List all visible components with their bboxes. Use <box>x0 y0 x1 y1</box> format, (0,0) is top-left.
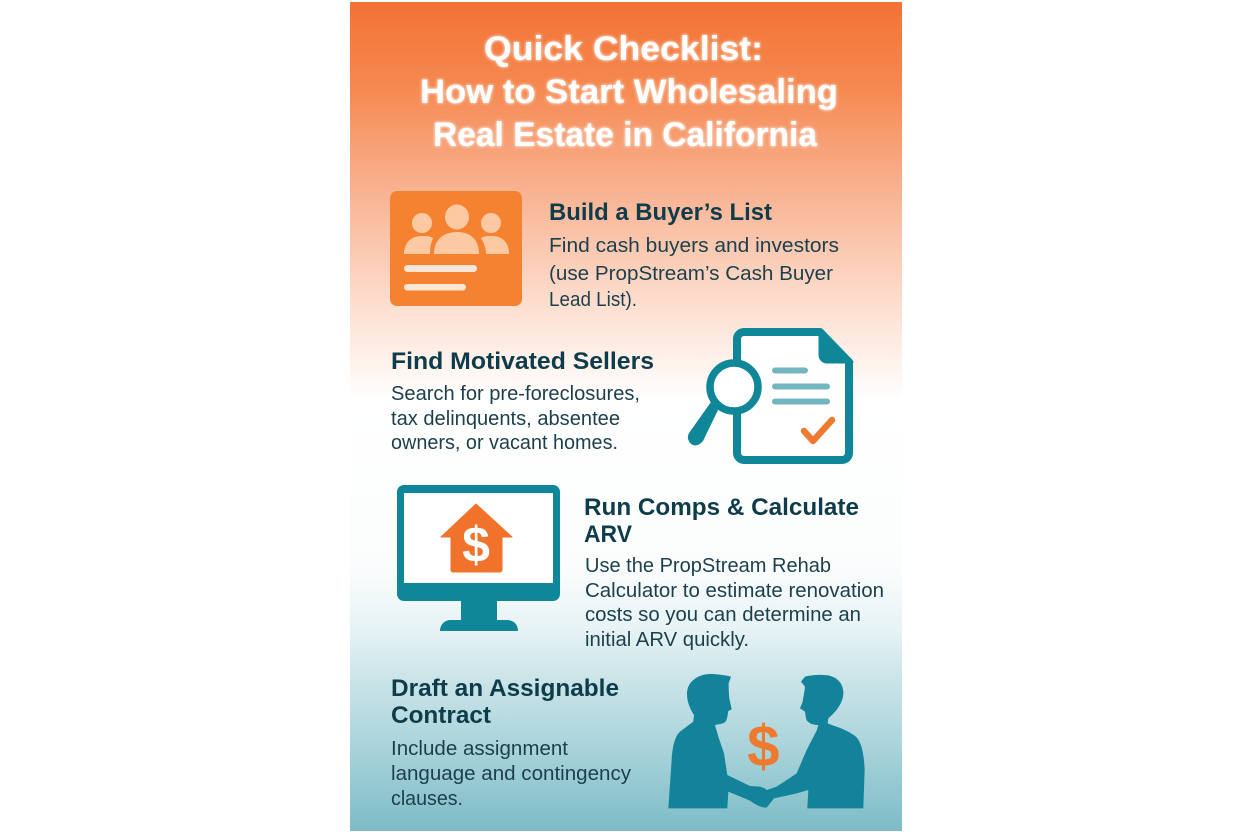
heading: Run Comps & Calculate <box>584 494 859 521</box>
title: Quick Checklist: <box>484 30 763 68</box>
icon: buyer list card <box>390 191 522 306</box>
description: Calculator to estimate renovation <box>585 580 884 602</box>
section: run comps and calculate arv <box>584 494 884 651</box>
heading: Build a Buyer’s List <box>549 199 772 226</box>
heading: Contract <box>391 702 491 729</box>
section: build a buyer's list <box>549 199 839 311</box>
title: Real Estate in California <box>433 116 818 154</box>
title: How to Start Wholesaling <box>420 73 838 111</box>
title <box>420 30 838 154</box>
icon: document with magnifier and check <box>688 330 852 460</box>
description: clauses. <box>391 788 463 810</box>
description: Lead List). <box>549 289 637 311</box>
heading: ARV <box>584 521 632 548</box>
icon: monitor with house: $ <box>462 517 490 573</box>
background panel <box>350 2 902 831</box>
section: draft an assignable contract <box>391 675 631 810</box>
description: owners, or vacant homes. <box>391 432 618 454</box>
heading <box>584 494 859 548</box>
description <box>549 235 839 311</box>
description: (use PropStream’s Cash Buyer <box>549 263 833 285</box>
description <box>391 738 631 810</box>
description: tax delinquents, absentee <box>391 408 620 430</box>
description <box>391 383 640 454</box>
heading: Draft an Assignable <box>391 675 619 702</box>
description: costs so you can determine an <box>585 604 861 626</box>
description: language and contingency <box>391 763 631 785</box>
icon: handshake with dollar sign <box>668 674 865 808</box>
icon: monitor with house <box>397 485 560 631</box>
section: find motivated sellers <box>391 348 654 454</box>
description <box>585 555 884 651</box>
description: Include assignment <box>391 738 568 760</box>
description: Find cash buyers and investors <box>549 235 839 257</box>
heading <box>391 675 619 729</box>
description: initial ARV quickly. <box>585 629 749 651</box>
heading: Find Motivated Sellers <box>391 348 654 375</box>
icon: handshake with dollar sign: $ <box>747 714 780 779</box>
description: Use the PropStream Rehab <box>585 555 831 577</box>
description: Search for pre-foreclosures, <box>391 383 640 405</box>
